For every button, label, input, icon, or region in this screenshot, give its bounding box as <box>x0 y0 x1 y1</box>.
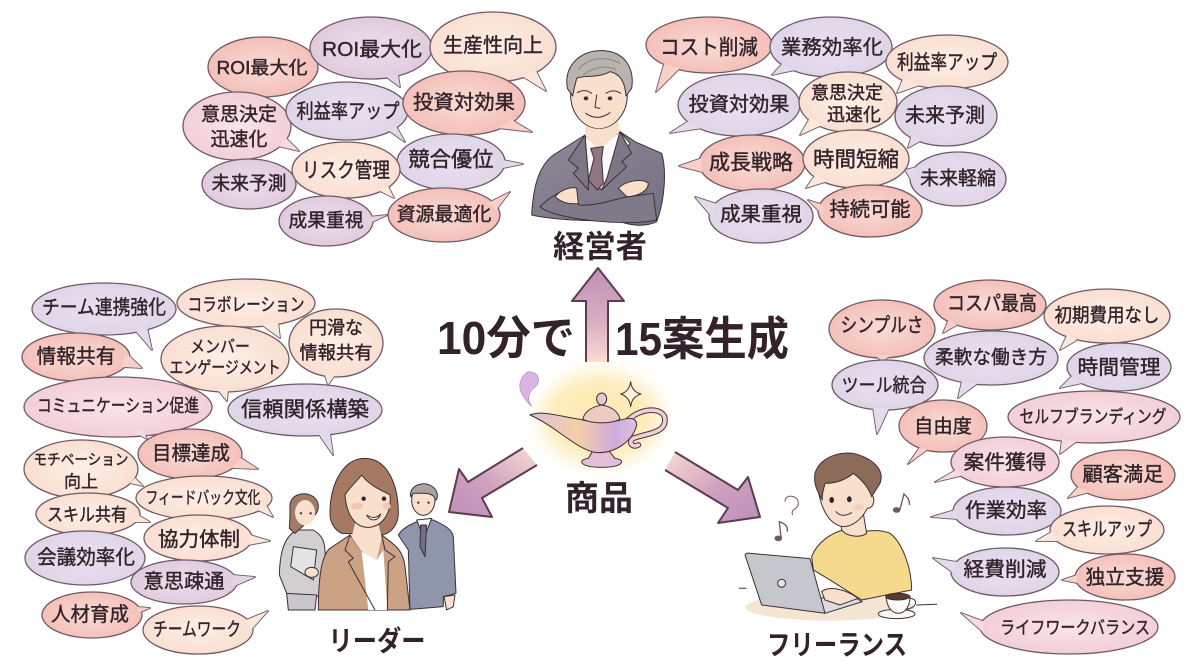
bubble: コラボレーション <box>177 279 315 338</box>
bubble: 人材育成: 人材育成 <box>51 603 129 626</box>
bubble: 投資対効果 <box>403 71 532 135</box>
bubble: モチベーション 向上: 向上 <box>64 472 98 492</box>
bubble: 成長戦略: 成長戦略 <box>709 152 793 174</box>
bubble: 会議効率化: 会議効率化 <box>37 546 135 569</box>
coffee cup <box>878 593 916 619</box>
bubble: 資源最適化 <box>388 188 510 242</box>
bubble: 利益率アップ: 利益率アップ <box>296 100 400 123</box>
bubble: 投資対効果: 投資対効果 <box>688 93 790 116</box>
bubble: 自由度 <box>899 400 987 464</box>
face <box>829 497 834 503</box>
bubble: ROI最大化: ROI最大化 <box>216 58 308 78</box>
headline: 10分で: 10分で <box>437 312 575 364</box>
bubble: コミュニケーション促進 <box>24 377 212 439</box>
bubble: 信頼関係構築: 信頼関係構築 <box>241 398 369 422</box>
executive hair <box>567 51 632 96</box>
bubble: 意思決定 迅速化: 迅速化 <box>210 128 268 150</box>
bubble: 未来予測 <box>895 86 997 148</box>
bubble: 作業効率 <box>931 487 1061 535</box>
laptop lid <box>745 553 825 613</box>
bubble: ROI最大化 mauve: ROI最大化 <box>322 38 422 61</box>
bubble: シンプルさ: シンプルさ <box>840 315 924 337</box>
executive lapels <box>568 132 632 190</box>
bubble: 未来予測: 未来予測 <box>212 172 286 194</box>
bubble: 意思決定 迅速化 <box>799 72 897 135</box>
music notes <box>775 494 909 541</box>
neck <box>840 513 867 536</box>
bubble: メンバー エンゲージメント: エンゲージメント <box>170 358 280 378</box>
illustration: leader team <box>279 458 456 610</box>
bubble: 利益率アップ <box>286 82 408 142</box>
arrow: right-down to freelancer <box>665 452 760 523</box>
bubble: コミュニケーション促進: コミュニケーション促進 <box>37 396 199 416</box>
bubble: 自由度: 自由度 <box>914 416 972 438</box>
main woman jacket <box>318 535 410 610</box>
bubble: チーム連携強化 <box>32 283 176 350</box>
bubble: 円滑な 情報共有: 円滑な <box>309 318 363 338</box>
arrow: up to executive <box>572 268 624 362</box>
bubble: フィードバック文化: フィードバック文化 <box>146 488 260 508</box>
bubble: 意思疎通 <box>131 560 255 604</box>
executive ears and head <box>571 62 627 128</box>
bubble: 成果重視: 成果重視 <box>288 210 364 232</box>
bubble: 競合優位: 競合優位 <box>408 148 494 172</box>
bubble: 業務効率化 <box>770 17 892 77</box>
bubble: 業務効率化: 業務効率化 <box>781 36 883 59</box>
bubble: 持続可能 <box>808 185 922 237</box>
bubble: 円滑な 情報共有: 情報共有 <box>300 343 372 363</box>
bubble: 意思疎通: 意思疎通 <box>144 570 224 593</box>
label: 商品: 商品 <box>565 480 633 518</box>
executive neck <box>585 113 620 151</box>
bubble: スキル共有: スキル共有 <box>47 505 127 525</box>
sparkle <box>621 382 641 407</box>
bubble: シンプルさ <box>829 300 935 362</box>
label: フリーランス: フリーランス <box>767 630 907 660</box>
lamp knob <box>597 393 607 405</box>
bubble: 成果重視 <box>695 189 813 243</box>
bubble: チーム連携強化: チーム連携強化 <box>42 296 166 319</box>
bubble: 投資対効果: 投資対効果 <box>413 91 515 114</box>
glow behind lamp <box>541 372 661 464</box>
lamp smoke <box>520 372 539 407</box>
bubble: セルフブランディング: セルフブランディング <box>1020 406 1166 427</box>
bubble: ツール統合 <box>832 360 938 434</box>
bubble: 利益率アップ <box>886 35 1008 93</box>
bubble: 時間短縮: 時間短縮 <box>813 148 899 172</box>
bubble: 円滑な 情報共有 <box>289 309 383 385</box>
executive shirt <box>585 132 630 190</box>
bubble: 意思決定 迅速化 <box>183 92 299 160</box>
lamp foot <box>582 450 622 467</box>
executive tie <box>588 147 603 190</box>
bubble: 作業効率: 作業効率 <box>965 499 1047 522</box>
hair <box>815 453 881 500</box>
bubble: モチベーション 向上: モチベーション <box>34 452 128 468</box>
bubble: チームワーク <box>143 606 268 654</box>
lamp lid <box>583 405 620 423</box>
illustration: executive <box>532 51 664 225</box>
bubble: ライフワークバランス <box>961 600 1158 654</box>
executive face <box>577 91 621 117</box>
bubble: 持続可能: 持続可能 <box>830 198 910 221</box>
main woman neck <box>352 523 382 560</box>
illustration: freelancer <box>739 453 937 621</box>
bubble: コスト削減 <box>646 17 772 92</box>
bubble: 競合優位 <box>397 134 523 190</box>
bubble: コスパ最高: コスパ最高 <box>947 292 1037 315</box>
main woman face <box>345 475 390 527</box>
bubble: 意思決定 迅速化: 意思決定 <box>201 104 277 126</box>
bubble: 成果重視 <box>279 196 387 246</box>
bubble: 顧客満足: 顧客満足 <box>1082 463 1164 486</box>
bubble: 初期費用なし: 初期費用なし <box>1054 304 1160 326</box>
bubble: コスト削減: コスト削減 <box>660 36 758 60</box>
bubble: 利益率アップ: 利益率アップ <box>897 51 997 74</box>
bubble: 独立支援 <box>1062 554 1175 600</box>
bubble: 資源最適化: 資源最適化 <box>396 204 492 226</box>
bubble: 案件獲得 <box>935 437 1059 487</box>
bubble: 生産性向上 <box>430 12 556 91</box>
lamp body <box>530 413 637 453</box>
desk wash <box>745 594 915 621</box>
bubble: 柔軟な働き方 <box>924 331 1058 398</box>
desk lines <box>739 588 937 605</box>
bubble: 情報共有: 情報共有 <box>36 345 116 368</box>
bubble: 時間短縮 <box>803 130 909 188</box>
bubble: ツール統合: ツール統合 <box>842 374 926 396</box>
executive hands <box>555 181 648 204</box>
lamp handle <box>627 410 665 446</box>
bubble: モチベーション 向上 <box>24 440 143 498</box>
main woman hair <box>330 458 398 535</box>
colleague woman <box>279 494 325 610</box>
bubble: 時間管理 <box>1060 343 1171 391</box>
bubble: ROI最大化 mauve <box>310 17 432 87</box>
bubble: 未来予測: 未来予測 <box>905 104 985 127</box>
bubble: チームワーク: チームワーク <box>153 618 241 640</box>
panel: leader speech bubbles <box>22 279 383 654</box>
bubble: セルフブランディング <box>1008 391 1180 454</box>
bubble: 顧客満足 <box>1068 450 1175 500</box>
bubble: スキルアップ <box>1036 506 1164 554</box>
bubble: 目標達成: 目標達成 <box>152 442 230 465</box>
bubble: 未来軽縮 <box>905 152 1006 206</box>
bubble: ライフワークバランス: ライフワークバランス <box>1000 618 1150 638</box>
bubble: 初期費用なし <box>1044 289 1170 350</box>
bubble: 投資対効果 <box>670 74 800 136</box>
headline: 15案生成: 15案生成 <box>615 313 789 365</box>
bubble: 生産性向上: 生産性向上 <box>443 34 543 57</box>
bubble: 時間管理: 時間管理 <box>1078 356 1160 379</box>
bubble: 経費削減: 経費削減 <box>964 558 1046 581</box>
bubble: リスク管理: リスク管理 <box>302 160 390 182</box>
bubble: スキルアップ: スキルアップ <box>1062 518 1152 540</box>
bubble: 情報共有 <box>22 333 142 381</box>
panel: executive speech bubbles right <box>646 17 1008 243</box>
icon: magic lamp <box>520 372 665 467</box>
bubble: 信頼関係構築 <box>228 384 382 455</box>
panel: freelancer speech bubbles <box>829 280 1180 654</box>
bubble: 意思決定 迅速化: 意思決定 <box>811 83 883 103</box>
bubble: 柔軟な働き方: 柔軟な働き方 <box>935 346 1047 368</box>
hands <box>822 589 858 605</box>
bubble: コスパ最高 <box>934 280 1046 333</box>
bubble: 独立支援: 独立支援 <box>1086 566 1164 589</box>
bubble: リスク管理 <box>292 142 400 198</box>
laptop logo <box>778 579 786 587</box>
sweater <box>812 530 912 600</box>
bubble: 経費削減 <box>933 548 1059 596</box>
panel: executive speech bubbles left <box>183 12 556 246</box>
main woman lapels <box>345 535 395 610</box>
head <box>817 463 874 527</box>
bubble: 協力体制 <box>144 515 270 561</box>
laptop base <box>820 595 862 613</box>
bubble: 目標達成 <box>138 429 258 479</box>
bubble: 成長戦略 <box>679 135 805 191</box>
bubble: 協力体制: 協力体制 <box>158 528 240 551</box>
bubble: 意思決定 迅速化: 迅速化 <box>827 105 881 125</box>
executive crossed arms <box>540 188 657 223</box>
bubble: コラボレーション: コラボレーション <box>188 295 304 315</box>
bubble: 会議効率化 <box>25 531 145 585</box>
executive suit <box>532 132 664 225</box>
bubble: 未来予測 <box>202 159 296 209</box>
bubble: ROI最大化 <box>208 37 318 97</box>
arrow: left-down to leader <box>449 448 537 517</box>
label: リーダー: リーダー <box>328 624 426 656</box>
bubble: フィードバック文化 <box>136 476 273 520</box>
bubble: メンバー エンゲージメント <box>161 326 289 401</box>
main woman blouse <box>362 550 387 610</box>
bubble: 人材育成 <box>42 592 150 638</box>
bubble: 案件獲得: 案件獲得 <box>964 451 1046 474</box>
bubble: スキル共有 <box>36 493 150 535</box>
colleague man <box>398 484 456 610</box>
bubble: 成果重視: 成果重視 <box>720 203 802 226</box>
bubble: メンバー エンゲージメント: メンバー <box>190 338 250 356</box>
bubble: 未来軽縮: 未来軽縮 <box>920 168 996 190</box>
label: 経営者: 経営者 <box>553 230 647 264</box>
